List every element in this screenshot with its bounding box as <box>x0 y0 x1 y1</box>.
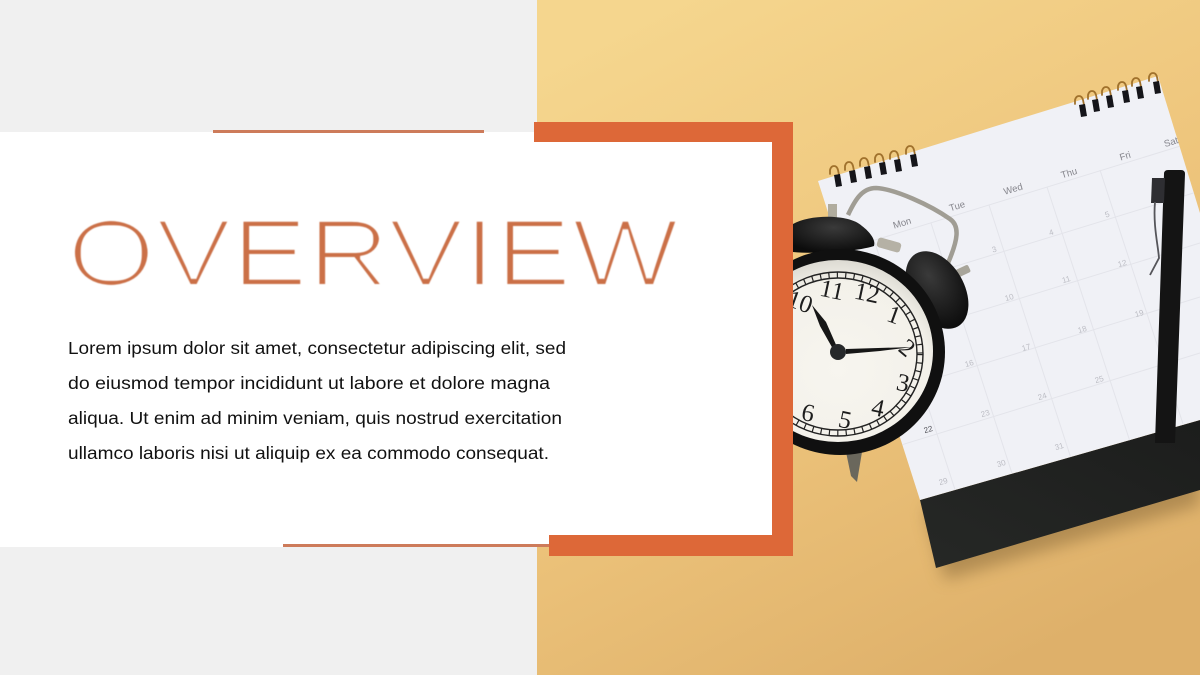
calendar dates: 30 <box>996 458 1007 469</box>
calendar dates: 16 <box>964 358 975 369</box>
panel: grey background <box>0 0 537 675</box>
panel: white text panel <box>0 132 772 547</box>
pen clip wire <box>1150 202 1159 275</box>
pen clip head <box>1151 178 1165 203</box>
calendar weekday labels: Thu <box>1060 166 1079 181</box>
clock numerals: 5 <box>836 406 854 435</box>
pen body <box>1155 170 1185 443</box>
clock right bell <box>893 240 981 340</box>
calendar dates: 31 <box>1054 441 1065 452</box>
calendar dates: 17 <box>1021 342 1032 353</box>
calendar dates: 10 <box>1004 292 1015 303</box>
orange frame <box>534 122 793 556</box>
calendar spiral binding left <box>830 146 918 187</box>
clock numerals: 12 <box>852 278 882 309</box>
calendar dates: 3 <box>991 244 998 255</box>
clock foot <box>846 452 862 482</box>
bottom accent line <box>283 544 549 547</box>
calendar dates: 24 <box>1037 391 1048 402</box>
clock hub <box>830 344 846 360</box>
body text: ullamco laboris nisi ut aliquip ex ea commodo consequat. <box>68 443 549 463</box>
calendar shadow <box>925 430 1200 580</box>
clock numerals: 6 <box>799 399 817 428</box>
clock numerals: 3 <box>894 369 912 398</box>
body text: aliqua. Ut enim ad minim veniam, quis nostrud exercitation <box>68 408 562 428</box>
clock left post <box>828 204 837 219</box>
calendar <box>818 73 1200 568</box>
clock numerals: 10 <box>783 286 816 319</box>
clock numerals: 11 <box>817 275 846 306</box>
calendar weekday labels <box>892 135 1180 232</box>
calendar weekday labels: Wed <box>1002 182 1024 198</box>
clock minute track <box>753 272 923 436</box>
clock left bell <box>793 217 874 253</box>
photo: alarm clock and calendar on yellow background <box>537 0 1200 675</box>
clock body <box>735 249 945 455</box>
title: OVERVIEW <box>67 200 679 306</box>
clock face <box>743 260 933 442</box>
calendar weekday labels: Sat <box>1163 135 1180 150</box>
calendar dates: 5 <box>1104 209 1111 220</box>
clock hour hand <box>812 305 837 349</box>
calendar dates: 11 <box>1061 274 1072 285</box>
calendar spiral binding right <box>1075 73 1161 117</box>
calendar weekday labels: Fri <box>1118 150 1132 163</box>
calendar page <box>818 76 1200 500</box>
clock right post <box>955 264 971 278</box>
calendar dates: 25 <box>1094 374 1105 385</box>
clock handle <box>848 188 957 263</box>
alarm clock <box>735 188 981 482</box>
calendar weekday labels: Mon <box>892 216 913 232</box>
calendar dates <box>923 209 1145 487</box>
clock numerals: 1 <box>883 301 904 330</box>
photo background <box>537 0 1200 675</box>
calendar dates: 12 <box>1117 258 1128 269</box>
pen <box>1150 170 1185 443</box>
calendar dates: 23 <box>980 408 991 419</box>
clock striker <box>876 237 902 253</box>
top accent line <box>213 130 484 133</box>
clock numerals: 4 <box>869 394 887 423</box>
body text: Lorem ipsum dolor sit amet, consectetur adipiscing elit, sed <box>68 338 566 358</box>
calendar dates: 4 <box>1048 227 1055 238</box>
calendar dates: 19 <box>1134 308 1145 319</box>
calendar black base <box>920 420 1200 568</box>
clock numerals <box>783 275 920 435</box>
clock numerals: 2 <box>893 334 920 363</box>
calendar weekday labels: Tue <box>948 199 967 214</box>
calendar grid <box>874 146 1200 490</box>
calendar dates: 18 <box>1077 324 1088 335</box>
calendar dates: 29 <box>938 476 949 487</box>
body text <box>68 338 566 463</box>
calendar dates: 22 <box>923 424 934 435</box>
clock minute hand <box>846 347 913 354</box>
body text: do eiusmod tempor incididunt ut labore et dolore magna <box>68 373 550 393</box>
